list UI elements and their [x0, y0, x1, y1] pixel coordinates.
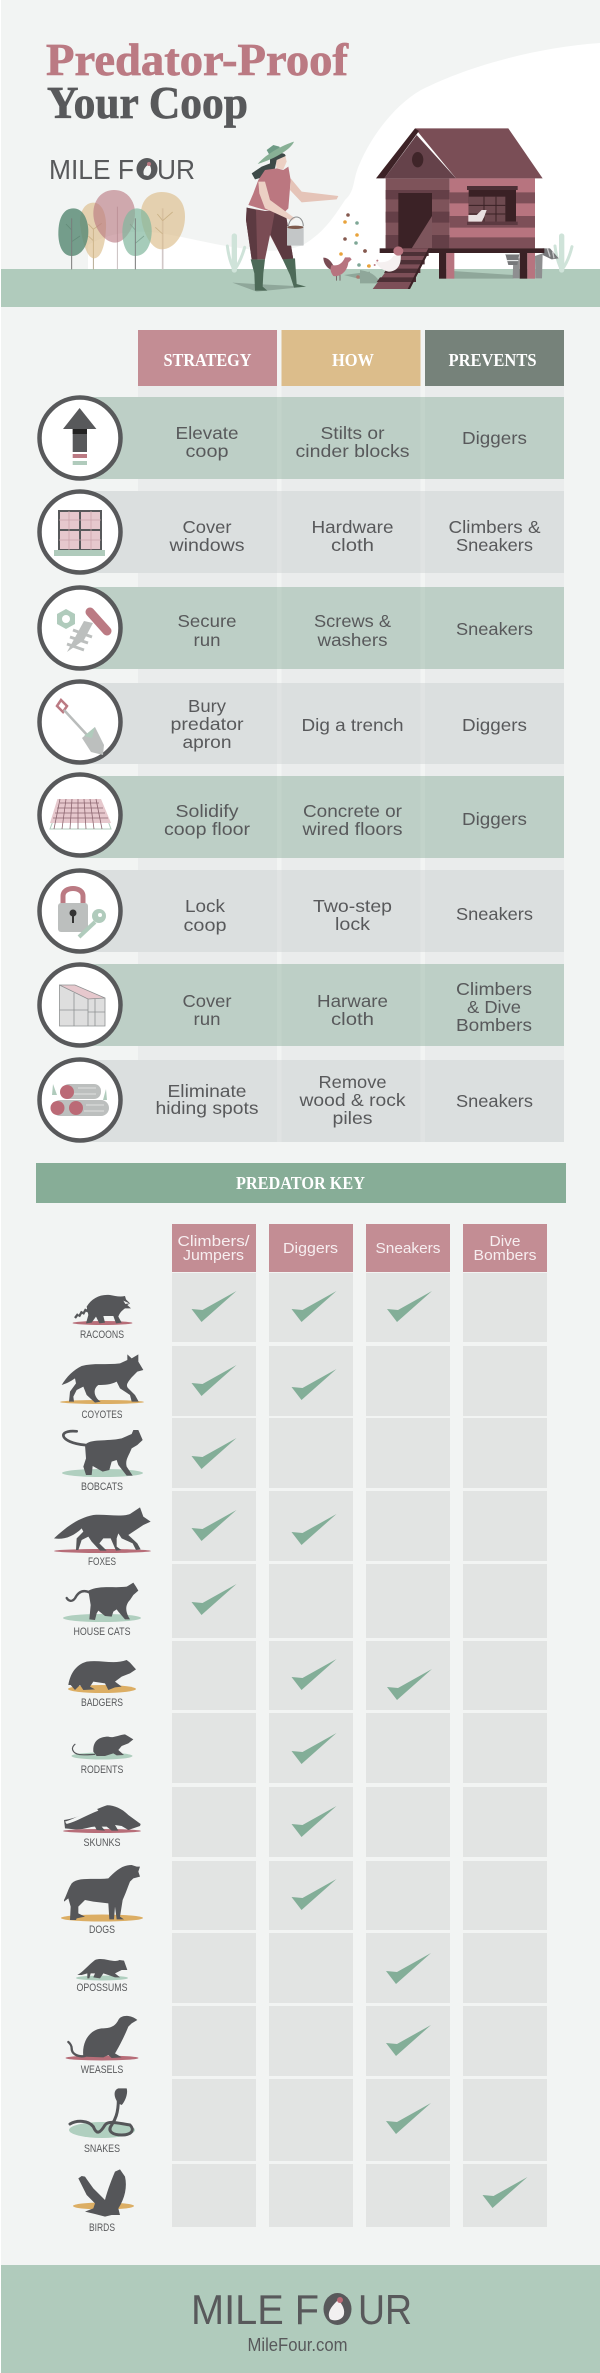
floor and stilts — [380, 248, 544, 253]
illustration: chicken feed dots — [339, 213, 371, 279]
illustration: chicken coop — [360, 128, 572, 289]
animal: skunk — [63, 1805, 141, 1849]
row: elevate coop: coop — [186, 441, 228, 461]
row: solidify coop floor: wired floors — [301, 819, 403, 839]
row: lock coop: lock — [335, 914, 370, 934]
animal: opossum — [76, 1959, 128, 1994]
logo: Mile Four header — [49, 154, 195, 185]
table headers: STRATEGY — [164, 350, 252, 370]
icon: wired floor — [50, 799, 111, 829]
row: cover windows — [40, 491, 564, 573]
predator grid headers: Jumpers — [183, 1247, 244, 1264]
row: solidify coop floor: coop floor — [164, 819, 250, 839]
footer band — [1, 2265, 600, 2373]
animal: house cat — [63, 1583, 141, 1638]
row: secure run: washers — [316, 630, 388, 650]
footer logo: O — [326, 2292, 349, 2325]
row: elevate coop: cinder blocks — [296, 441, 410, 461]
logo: Mile Four header: UR — [157, 154, 195, 185]
row: secure run — [40, 587, 564, 669]
row: solidify coop floor: Diggers — [462, 809, 527, 829]
hero white wave background — [88, 43, 600, 270]
row: secure run: run — [194, 630, 220, 650]
animal: bobcat — [62, 1430, 143, 1493]
animal: racoon — [72, 1295, 132, 1341]
animal: weasel — [66, 2016, 138, 2076]
row: cover windows: Cover — [182, 517, 232, 537]
row: cover windows: Climbers & — [448, 517, 541, 537]
row: bury predator apron: Bury — [188, 696, 226, 716]
animal: dog — [61, 1865, 143, 1936]
row: cover run — [40, 964, 564, 1046]
predator grid headers: Sneakers — [376, 1240, 440, 1257]
title: Predator-Proof — [46, 35, 349, 85]
predator grid headers: Diggers — [283, 1240, 338, 1257]
animal: fox — [54, 1507, 151, 1568]
row: eliminate hiding spots: piles — [332, 1108, 373, 1128]
row: eliminate hiding spots: hiding spots — [156, 1098, 259, 1118]
shadow under ramp — [344, 272, 370, 282]
roof — [384, 135, 456, 178]
row: cover run: run — [194, 1009, 220, 1029]
animal: rodent — [72, 1734, 133, 1776]
row: eliminate hiding spots: Eliminate — [168, 1081, 246, 1101]
predator key heading — [36, 1163, 566, 1203]
animal: skunk: SKUNKS — [84, 1837, 120, 1849]
plant left — [227, 236, 245, 270]
row: cover run: Climbers — [456, 979, 532, 999]
row: secure run: Screws & — [314, 611, 391, 631]
icon: up arrow — [63, 408, 96, 465]
window — [469, 190, 516, 222]
row: eliminate hiding spots: wood & rock — [298, 1090, 406, 1110]
animal: badger: BADGERS — [81, 1697, 123, 1709]
row: cover run: cloth — [331, 1009, 374, 1029]
row: bury predator apron: apron — [182, 732, 232, 752]
raccoon — [513, 253, 543, 278]
predator key heading: PREDATOR KEY — [236, 1173, 365, 1193]
row: elevate coop — [40, 397, 564, 479]
animal: bobcat: BOBCATS — [81, 1481, 123, 1493]
row: cover run: & Dive — [467, 997, 521, 1017]
plant right — [555, 236, 572, 270]
icon: covered run — [60, 985, 105, 1026]
illustration: trees — [58, 190, 185, 269]
animal: racoon: RACOONS — [80, 1329, 124, 1341]
animal: house cat: HOUSE CATS — [74, 1626, 130, 1638]
ramp — [373, 248, 431, 289]
predator grid headers: Climbers/ — [178, 1233, 250, 1250]
row: lock coop: coop — [184, 915, 226, 935]
predator grid cells — [172, 1273, 547, 2227]
icon: screw and nut — [57, 609, 107, 652]
animal: opossum: OPOSSUMS — [76, 1982, 128, 1994]
animal: snake: SNAKES — [84, 2143, 120, 2155]
footer logo: UR — [358, 2286, 412, 2333]
row: eliminate hiding spots: Remove — [318, 1072, 386, 1092]
footer website: MileFour.com — [248, 2335, 348, 2355]
row: elevate coop: Stilts or — [320, 423, 385, 443]
table headers: HOW — [332, 350, 374, 370]
animal: snake — [69, 2088, 135, 2155]
row: cover run: Harware — [317, 991, 388, 1011]
row: cover windows: Hardware — [312, 517, 394, 537]
icon: log pile — [50, 1084, 109, 1116]
row: secure run: Secure — [178, 611, 236, 631]
table headers — [138, 330, 564, 386]
row: lock coop: Lock — [185, 896, 225, 916]
row: cover run: Bombers — [456, 1015, 532, 1035]
title: Your Coop — [47, 78, 248, 128]
row: cover run: Cover — [182, 991, 232, 1011]
row: lock coop — [40, 870, 564, 952]
predator grid headers — [172, 1224, 547, 1272]
row: bury predator apron: Dig a trench — [302, 715, 404, 735]
row: eliminate hiding spots — [40, 1060, 564, 1142]
row: elevate coop: Diggers — [462, 428, 527, 448]
white hen — [375, 254, 401, 272]
row: cover windows: windows — [168, 535, 245, 555]
row: elevate coop: Elevate — [176, 423, 238, 443]
animal: fox: FOXES — [88, 1556, 116, 1568]
predator grid headers: Bombers — [474, 1247, 536, 1264]
predator grid headers: Dive — [490, 1233, 520, 1250]
illustration: woman feeding chickens — [227, 142, 370, 292]
table: strategy column strips — [138, 386, 564, 1142]
logo: Mile Four header: O — [140, 159, 154, 179]
row: bury predator apron — [40, 682, 564, 764]
row: bury predator apron: predator — [170, 714, 244, 734]
logo: Mile Four header: MILE F — [49, 154, 134, 185]
animal: rodent: RODENTS — [81, 1764, 123, 1776]
animal: coyote — [60, 1354, 144, 1421]
animal: dog: DOGS — [89, 1924, 115, 1936]
check marks — [192, 1291, 528, 2208]
row: lock coop: Two-step — [313, 896, 392, 916]
icon: shovel — [57, 700, 104, 755]
icon: window — [54, 511, 105, 556]
animal: coyote: COYOTES — [82, 1409, 122, 1421]
animal: bird — [73, 2169, 134, 2234]
icon: padlock and key — [58, 888, 106, 937]
row: solidify coop floor: Concrete or — [303, 801, 402, 821]
row: lock coop: Sneakers — [456, 904, 533, 924]
footer logo: MILE F — [191, 2286, 319, 2333]
row: solidify coop floor: Solidify — [176, 801, 239, 821]
row: bury predator apron: Diggers — [462, 715, 527, 735]
row: secure run: Sneakers — [456, 619, 533, 639]
footer logo — [191, 2286, 412, 2333]
hero ground band — [1, 269, 600, 307]
row: eliminate hiding spots: Sneakers — [456, 1091, 533, 1111]
walls — [386, 178, 450, 248]
row: cover windows: Sneakers — [456, 535, 533, 555]
chicken brown — [323, 258, 335, 270]
animal: bird: BIRDS — [89, 2222, 115, 2234]
row: solidify coop floor — [40, 774, 564, 858]
row: cover windows: cloth — [331, 535, 374, 555]
animal: weasel: WEASELS — [81, 2064, 123, 2076]
title — [46, 35, 349, 128]
animal: badger — [68, 1660, 136, 1709]
table headers: PREVENTS — [448, 350, 536, 370]
door — [398, 193, 432, 248]
